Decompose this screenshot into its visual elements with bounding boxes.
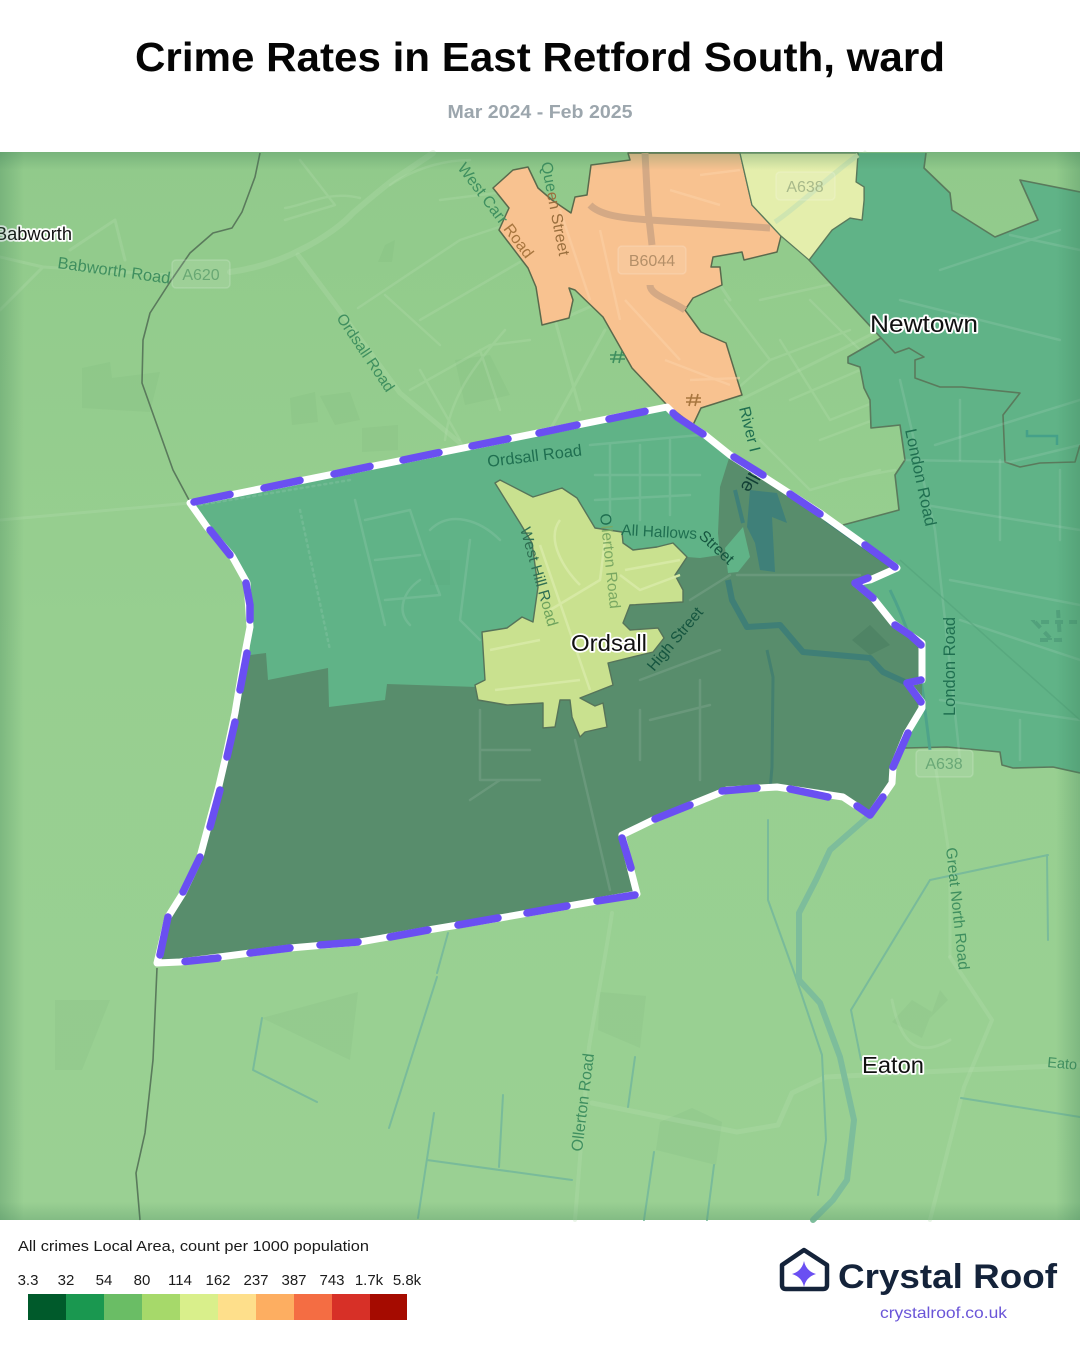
label: Queen Street: Queen Street [537, 161, 572, 258]
area: East Newtown higher-density green zone [809, 153, 1080, 773]
subtitle: date range: Mar 2024 - Feb 2025 [448, 101, 632, 122]
icon: house with star [782, 1250, 827, 1289]
drains and streams on light areas [253, 820, 1080, 1220]
River Idle lake and channels [728, 490, 907, 790]
badge: B6044: B6044 [629, 253, 675, 270]
logo: Crystal Roof [782, 1250, 1058, 1322]
choropleth map panel [0, 152, 1080, 1220]
label: River Idle tail: dle [736, 464, 766, 496]
title: Crime Rates in East Retford South, ward [135, 34, 945, 80]
label: Ollerton Road south: Ollerton Road [569, 1052, 598, 1152]
badge: A620 [172, 260, 230, 288]
ward interior: residential streets [200, 435, 700, 650]
legend values: 3.3 [18, 1272, 38, 1289]
river: lower course [799, 815, 870, 1220]
place: Ordsall: Ordsall [571, 630, 647, 656]
legend values: 743 [319, 1272, 345, 1289]
label: High Street: High Street [644, 604, 707, 675]
legend values: 32 [58, 1272, 74, 1289]
mid-green sliver beside the lake [725, 527, 750, 573]
ward interior: mid-green area [190, 407, 922, 800]
dark area streets [470, 575, 890, 890]
label: All Hallows Street: All Hallows [621, 522, 698, 543]
land-use patches [55, 240, 948, 1165]
label: Eato (cropped): Eato [1047, 1055, 1078, 1074]
website url: crystalroof.co.uk [880, 1305, 1008, 1322]
place: Eaton: Eaton [862, 1052, 924, 1078]
area: pale yellow-green zone north [740, 153, 864, 260]
label: Ollerton Road in ward: O llerton Road [596, 513, 623, 610]
map base [0, 152, 1080, 1220]
legend values: 162 [205, 1272, 231, 1289]
badge: A638 north [776, 172, 835, 200]
label: River Idle: River I [735, 405, 763, 454]
label: Ordsall Road north: Ordsall Road [333, 311, 397, 395]
area: Ordsall pale green zone [475, 480, 687, 737]
legend values: 237 [243, 1272, 269, 1289]
parish boundary lines [136, 153, 260, 1220]
badge: A638 south: A638 [925, 756, 963, 773]
label: Great North Road: Great North Road [942, 847, 972, 971]
wordmark: Crystal Roof [838, 1258, 1058, 1296]
legend values: 387 [281, 1272, 307, 1289]
badge: A638 south [916, 750, 973, 777]
legend values: 5.8k [393, 1272, 422, 1289]
icon: rail station town [686, 394, 701, 406]
label: West Hill Road: West Hill Road [516, 525, 561, 628]
label: West Carr Road: West Carr Road [454, 160, 536, 262]
legend values: 80 [134, 1272, 150, 1289]
map labels [0, 160, 1078, 1152]
legend title: All crimes Local Area, count per 1000 population [18, 1238, 369, 1255]
road network on light areas [0, 152, 1080, 1220]
legend values: 1.7k [355, 1272, 384, 1289]
label: All Hallows Street end: Street [695, 527, 738, 569]
icon: rail station north [610, 351, 625, 363]
area: high crime town centre (orange) [493, 153, 781, 425]
map edge vignette [0, 152, 1080, 1220]
badge: A620: A620 [182, 267, 220, 284]
legend [18, 1238, 422, 1320]
legend colour scale [28, 1294, 407, 1320]
badge: A638 north: A638 [786, 179, 824, 196]
label: London Road south: London Road [941, 617, 959, 716]
legend values: 114 [168, 1272, 192, 1289]
label: London Road north: London Road [901, 427, 939, 528]
label: Ordsall Road in ward: Ordsall Road [486, 442, 583, 471]
ward interior: dark low-crime area [157, 455, 922, 963]
legend values [18, 1272, 422, 1289]
place: Newtown: Newtown [870, 311, 978, 338]
legend values: 54 [96, 1272, 112, 1289]
ward boundary: white line with purple dashes [157, 407, 922, 963]
badge: B6044 [618, 246, 686, 274]
label: Babworth Road: Babworth Road [56, 254, 172, 288]
